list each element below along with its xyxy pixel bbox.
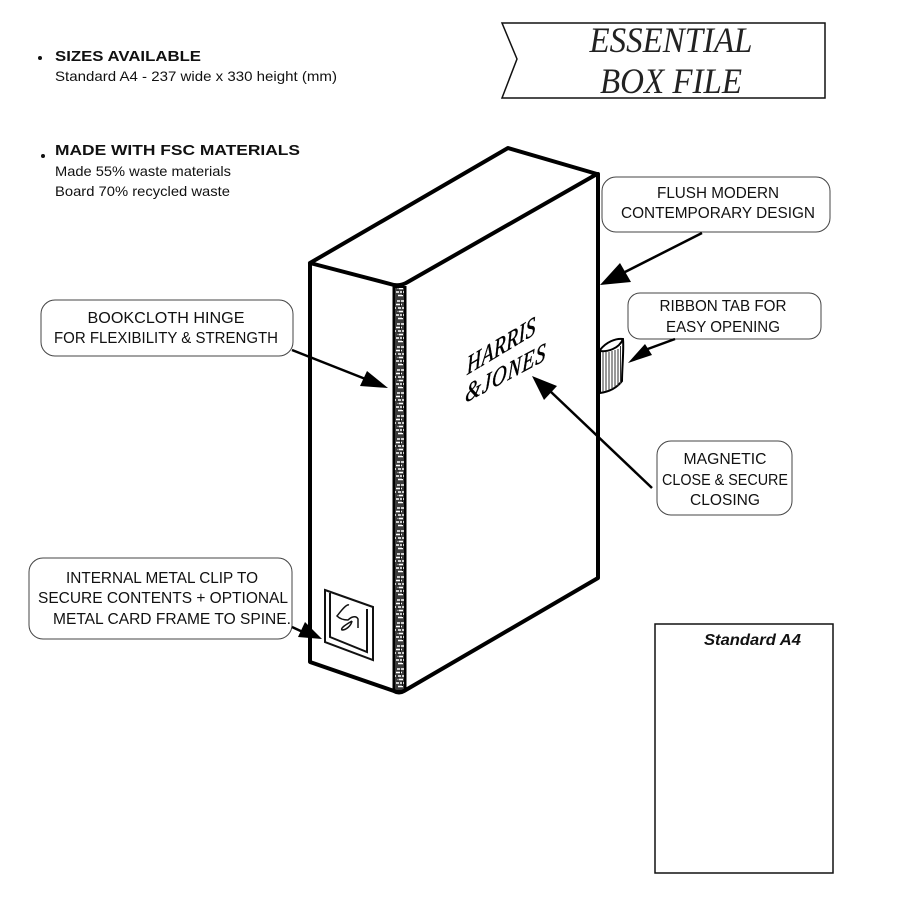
callout: internal metal clip: INTERNAL METAL CLIP TO xyxy=(66,570,258,587)
callout: internal metal clip: SECURE CONTENTS + OPTIONAL xyxy=(38,590,288,607)
callout: bookcloth hinge xyxy=(41,300,293,356)
callout: flush modern design xyxy=(602,177,830,232)
title banner: BOX FILE xyxy=(600,61,742,101)
arrow: to ribbon tab xyxy=(628,339,675,363)
callout: flush modern design: FLUSH MODERN xyxy=(657,185,779,202)
size panel: Standard A4: Standard A4 xyxy=(704,632,801,649)
arrow: to box edge xyxy=(600,233,702,285)
size panel: Standard A4 xyxy=(655,624,833,873)
box file illustration xyxy=(310,148,598,693)
box faces xyxy=(310,148,598,693)
callout: magnetic close: CLOSE & SECURE xyxy=(662,472,788,489)
callout: bookcloth hinge: FOR FLEXIBILITY & STRENGTH xyxy=(54,330,278,347)
bullet list: FSC materials: Made 55% waste materials xyxy=(55,163,231,179)
bookcloth hinge xyxy=(392,286,406,692)
callout: ribbon tab: RIBBON TAB FOR xyxy=(660,298,786,315)
callout: ribbon tab xyxy=(628,293,821,339)
arrow: to hinge xyxy=(292,350,388,388)
callout: internal metal clip: METAL CARD FRAME TO SPINE. xyxy=(53,611,291,628)
bullet list: FSC materials: MADE WITH FSC MATERIALS xyxy=(55,142,300,159)
bullet list: sizes available xyxy=(38,48,337,84)
callout: ribbon tab: EASY OPENING xyxy=(666,319,780,336)
bullet list: FSC materials: Board 70% recycled waste xyxy=(55,183,230,199)
box outline xyxy=(310,148,598,692)
callout: magnetic close: MAGNETIC xyxy=(684,451,766,468)
title banner xyxy=(502,20,825,101)
callout: flush modern design: CONTEMPORARY DESIGN xyxy=(621,205,815,222)
title banner: ESSENTIAL xyxy=(589,20,752,60)
Harris & Jones logo: HARRIS xyxy=(466,311,536,382)
arrow: to logo xyxy=(532,376,652,488)
bullet list: sizes available: Standard A4 - 237 wide x 330 height (mm) xyxy=(55,68,337,84)
arrow: to card frame xyxy=(292,622,322,639)
Harris & Jones logo: &JONES xyxy=(465,338,547,409)
callout: internal metal clip xyxy=(29,558,292,639)
callout: magnetic close xyxy=(657,441,792,515)
card frame on spine xyxy=(325,590,373,660)
callout: magnetic close: CLOSING xyxy=(690,492,760,509)
bullet list: FSC materials xyxy=(41,142,300,199)
ribbon tab xyxy=(600,339,623,393)
callout: bookcloth hinge: BOOKCLOTH HINGE xyxy=(88,310,244,327)
bullet list: sizes available: SIZES AVAILABLE xyxy=(55,48,201,65)
